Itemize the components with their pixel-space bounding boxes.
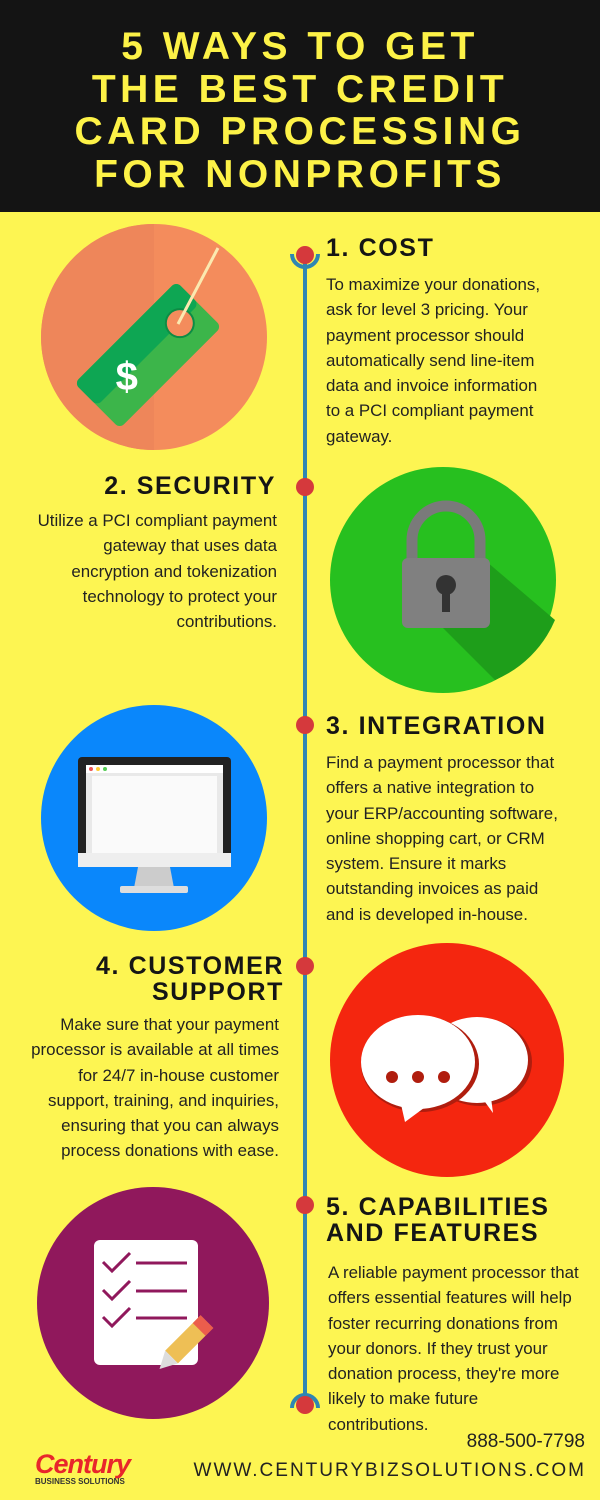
section 1 text	[326, 275, 540, 446]
section 4 heading: SUPPORT	[152, 978, 284, 1006]
section 5 heading: 5. CAPABILITIES	[326, 1193, 550, 1221]
section 2 text: contributions.	[177, 612, 277, 631]
icon: price tag: $	[116, 355, 138, 399]
section 5 text: offers essential features will help	[328, 1288, 572, 1307]
logo: BUSINESS SOLUTIONS	[35, 1477, 125, 1486]
timeline	[292, 246, 318, 1414]
section 3 text: outstanding invoices as paid	[326, 879, 538, 898]
section 5 text: contributions.	[328, 1415, 428, 1434]
section 3 text: your ERP/accounting software,	[326, 804, 558, 823]
section 1 text: ask for level 3 pricing. Your	[326, 300, 528, 319]
title: THE BEST CREDIT	[92, 68, 508, 110]
section 2 heading: 2. SECURITY	[104, 472, 276, 500]
section 3 text: system. Ensure it marks	[326, 854, 506, 873]
title band	[0, 0, 600, 212]
phone number: 888-500-7798	[467, 1431, 585, 1452]
section 2 text: technology to protect your	[83, 587, 277, 606]
section 1 text: automatically send line-item	[326, 351, 534, 370]
section 1 text: data and invoice information	[326, 376, 537, 395]
section 3 text: offers a native integration to	[326, 778, 534, 797]
website: WWW.CENTURYBIZSOLUTIONS.COM	[194, 1460, 586, 1481]
section 3 heading: 3. INTEGRATION	[326, 712, 547, 740]
icon: checklist	[37, 1187, 269, 1419]
section 4 heading: 4. CUSTOMER	[96, 952, 284, 980]
icon: speech bubbles	[330, 943, 564, 1177]
section 1 heading: 1. COST	[326, 234, 434, 262]
section 1 text: payment processor should	[326, 326, 524, 345]
title	[74, 25, 526, 196]
icon: monitor	[41, 705, 267, 931]
section 5 text: donation process, they're more	[328, 1364, 559, 1383]
section 3 text: Find a payment processor that	[326, 753, 554, 772]
section 4 text: process donations with ease.	[61, 1141, 279, 1160]
section 5 text: your donors. If they trust your	[328, 1339, 548, 1358]
section 3 text: and is developed in-house.	[326, 905, 528, 924]
title: CARD PROCESSING	[74, 110, 526, 153]
section 5 heading	[326, 1193, 550, 1247]
section 5 text	[328, 1263, 579, 1434]
section 2 text: encryption and tokenization	[71, 562, 277, 581]
section 4 text: support, training, and inquiries,	[48, 1091, 279, 1110]
icon: padlock	[330, 467, 556, 693]
section 3 text	[326, 753, 558, 924]
section 2 text	[38, 511, 278, 631]
section 2 text: Utilize a PCI compliant payment	[38, 511, 277, 530]
title: 5 WAYS TO GET	[121, 25, 479, 68]
section 1 text: gateway.	[326, 427, 392, 446]
section 5 text: A reliable payment processor that	[328, 1263, 579, 1282]
section 4 text: for 24/7 in-house customer	[78, 1066, 279, 1085]
section 5 heading: AND FEATURES	[326, 1219, 539, 1247]
section 2 text: gateway that uses data	[103, 536, 277, 555]
title: FOR NONPROFITS	[94, 152, 506, 196]
logo: Century	[35, 1449, 130, 1479]
section 5 text: likely to make future	[328, 1389, 478, 1408]
section 4 text	[31, 1015, 279, 1160]
section 5 text: foster recurring donations from	[328, 1314, 558, 1333]
section 4 text: ensuring that you can always	[61, 1116, 279, 1135]
section 3 text: online shopping cart, or CRM	[326, 829, 545, 848]
icon: price tag	[41, 224, 267, 450]
section 4 heading	[96, 952, 284, 1006]
section 4 text: Make sure that your payment	[60, 1015, 279, 1034]
section 1 text: to a PCI compliant payment	[326, 401, 533, 420]
section 1 text: To maximize your donations,	[326, 275, 540, 294]
section 4 text: processor is available at all times	[31, 1040, 279, 1059]
